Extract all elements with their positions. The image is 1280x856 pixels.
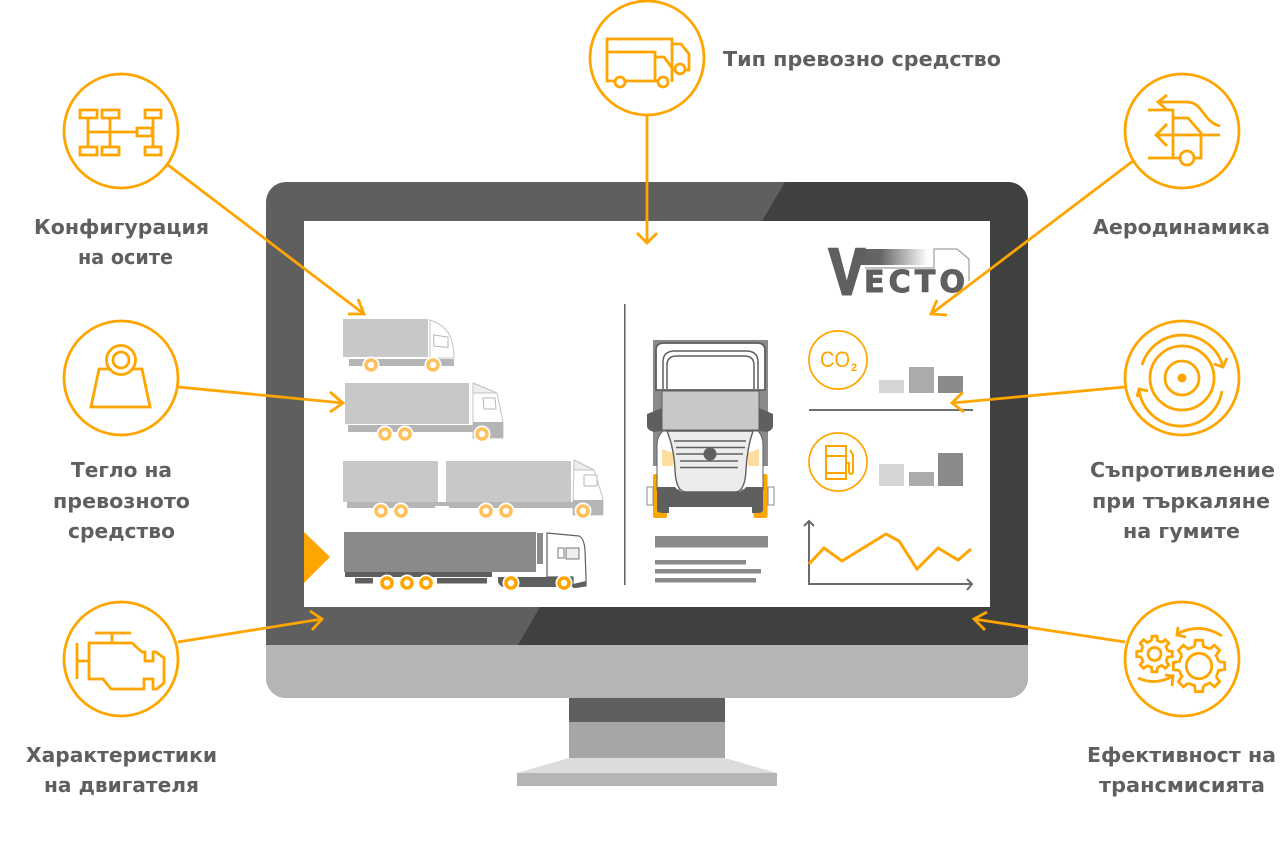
label: transmission: трансмисията — [1099, 773, 1265, 797]
truck: medium rigid — [345, 383, 503, 442]
icon: axle configuration — [64, 74, 178, 188]
monitor frame — [266, 182, 1028, 698]
screen divider — [624, 304, 626, 585]
label: aerodynamics: Аеродинамика — [1093, 215, 1270, 239]
label: engine: Характеристики — [26, 743, 217, 767]
arrow: axle configuration — [168, 165, 364, 314]
arrow: transmission — [974, 612, 1125, 642]
icon: engine — [64, 602, 178, 716]
truck: tractor trailer (selected) — [344, 532, 586, 592]
line chart — [804, 521, 972, 590]
icon: fuel pump — [809, 433, 867, 491]
arrow: rolling resistance — [952, 387, 1125, 412]
icon: vehicle weight — [64, 321, 178, 435]
rotation arrows — [1138, 627, 1222, 686]
truck: small rigid — [343, 319, 454, 374]
label: rolling resistance: на гумите — [1123, 519, 1240, 543]
VECTO logo: V — [829, 235, 865, 308]
label: rolling resistance: Съпротивление — [1090, 458, 1275, 482]
large gear — [1173, 640, 1225, 692]
label: transmission: Ефективност на — [1087, 743, 1276, 767]
bar chart: CO2 — [879, 367, 963, 393]
small gear — [1137, 636, 1172, 672]
arrow: vehicle weight — [178, 387, 343, 412]
arrow: engine — [178, 611, 322, 642]
icon: CO2 — [809, 331, 867, 389]
label: engine: на двигателя — [44, 773, 199, 797]
icon: rolling resistance — [1125, 321, 1239, 435]
text placeholder bars — [655, 536, 768, 582]
selection marker — [304, 532, 330, 583]
label: rolling resistance: при търкаляне — [1092, 489, 1270, 513]
VECTO logo — [829, 235, 969, 308]
heading: vehicle type: Тип превозно средство — [723, 47, 1001, 71]
label: axle configuration: на осите — [78, 245, 173, 269]
icon: vehicle type — [590, 1, 704, 115]
label: vehicle weight: Тегло на — [71, 458, 172, 482]
icon: aerodynamics — [1125, 74, 1239, 188]
label: axle configuration: Конфигурация — [34, 215, 209, 239]
monitor stand — [517, 698, 777, 786]
label: vehicle weight: средство — [68, 519, 175, 543]
label: vehicle weight: превозното — [53, 489, 190, 513]
arrow: aerodynamics — [931, 161, 1133, 315]
icon: CO2: 2 — [851, 362, 857, 374]
monitor — [266, 182, 1028, 786]
arrow: vehicle type — [637, 115, 657, 243]
screen — [304, 221, 990, 607]
icon: CO2: CO — [820, 347, 850, 372]
bar chart: fuel — [879, 453, 963, 486]
icon: transmission — [1125, 602, 1239, 716]
VECTO logo: ECTO — [864, 265, 965, 300]
truck front view — [647, 340, 774, 518]
truck: road train — [343, 460, 603, 520]
